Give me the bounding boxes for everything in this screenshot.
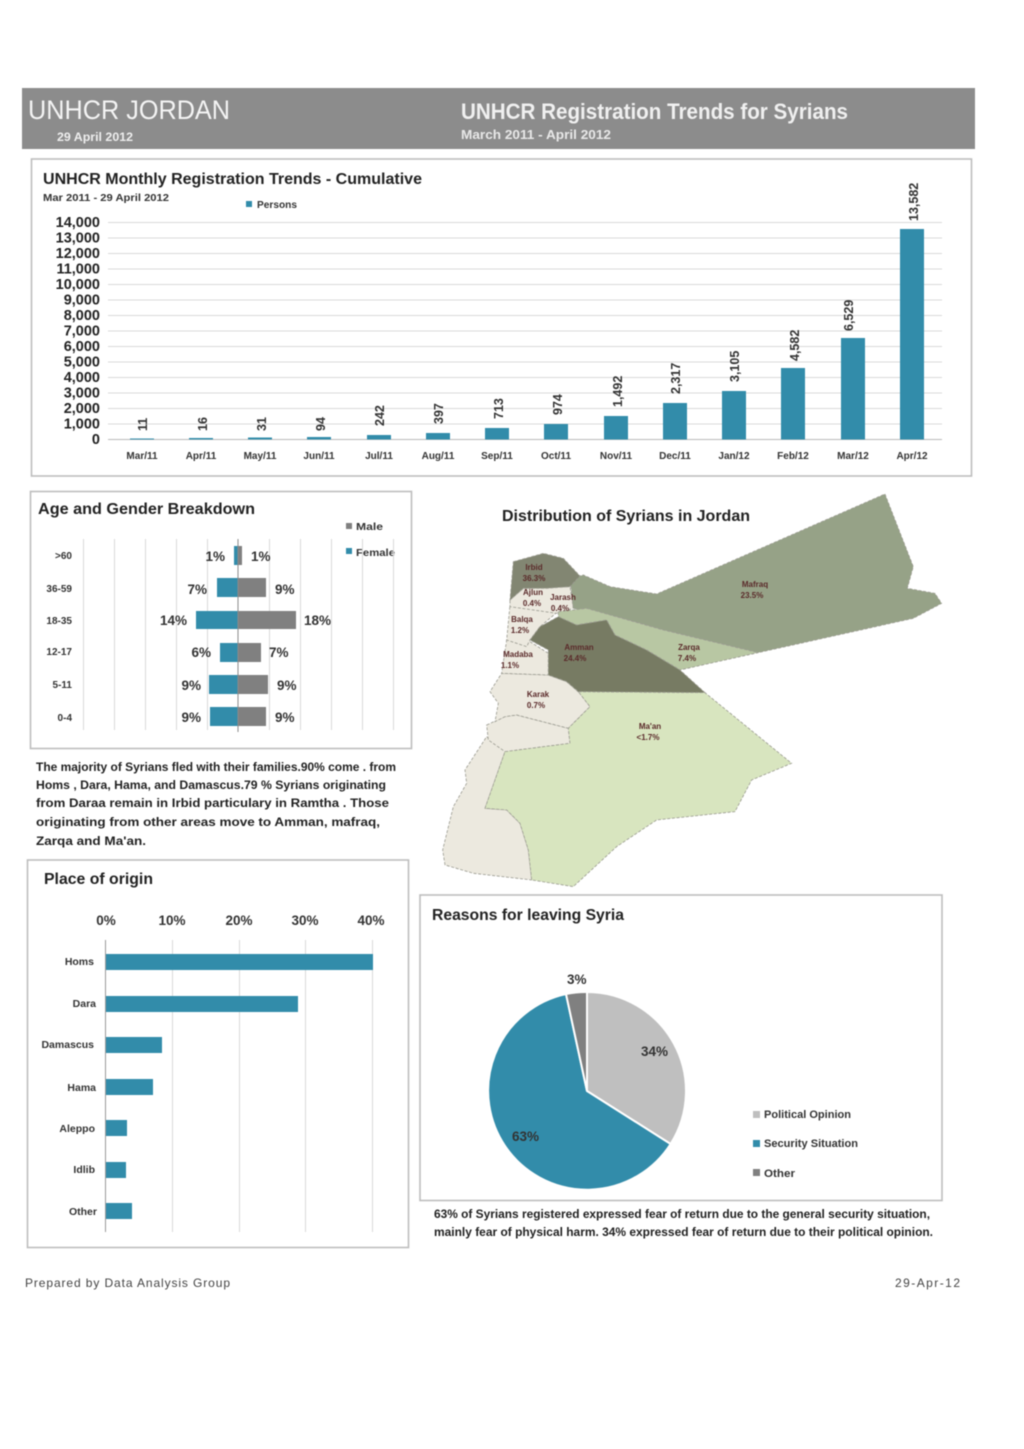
map labels: 24.4%	[564, 654, 586, 663]
bar value labels: 242	[373, 405, 387, 426]
origin axis labels: 0%	[96, 913, 116, 928]
y axis labels: 10,000	[56, 277, 100, 293]
region: Aqaba	[443, 737, 532, 880]
origin axis labels: 20%	[225, 913, 253, 928]
origin labels	[41, 956, 97, 1218]
pie chart	[488, 992, 686, 1190]
y axis labels: 6,000	[64, 339, 100, 355]
region: Balqa	[507, 605, 557, 647]
map of Jordan governorates	[443, 494, 942, 887]
bar value labels: 1,492	[611, 376, 625, 407]
map labels: 1.2%	[511, 626, 529, 635]
region: Amman	[530, 617, 705, 693]
text block: reasons summary: mainly fear of physical harm. 34% expressed fear of return due to their political opinion.	[434, 1225, 933, 1239]
map labels: Balqa	[511, 615, 533, 624]
female percent labels: 7%	[187, 582, 207, 597]
x axis labels: Jun/11	[303, 451, 335, 462]
x axis labels	[126, 451, 928, 462]
origin axis labels	[96, 913, 385, 928]
female percent labels: 9%	[181, 710, 201, 725]
bar value labels: 94	[314, 417, 328, 431]
female percent labels: 6%	[191, 645, 211, 660]
age chart title: Age and Gender Breakdown	[38, 501, 255, 518]
panel: age and gender breakdown	[30, 492, 412, 748]
x axis labels: Oct/11	[541, 451, 571, 462]
map labels: 7.4%	[678, 654, 696, 663]
map labels: 0.7%	[527, 701, 545, 710]
pie legend	[753, 1109, 858, 1180]
map labels: Amman	[564, 643, 594, 652]
pie labels: 3%	[567, 972, 587, 987]
region: Ajlun and Jarash	[510, 587, 573, 613]
map title: Distribution of Syrians in Jordan	[502, 508, 750, 525]
header subtitle: UNHCR Registration Trends for Syrians	[461, 99, 848, 124]
x axis labels: Feb/12	[777, 451, 809, 462]
y axis labels: 7,000	[64, 324, 100, 340]
origin chart title: Place of origin	[44, 871, 153, 888]
region: Karak	[490, 673, 590, 728]
y axis labels: 8,000	[64, 308, 100, 324]
bars	[130, 229, 924, 440]
origin bars	[106, 954, 373, 1219]
age labels: 12-17	[46, 647, 72, 658]
x axis labels: May/11	[244, 451, 277, 462]
map labels: Irbid	[525, 563, 543, 572]
male percent labels: 1%	[251, 549, 271, 564]
x axis labels: Sep/11	[481, 451, 513, 462]
region: Tafilah	[487, 715, 570, 752]
pie legend: Other	[764, 1168, 796, 1180]
reasons title: Reasons for leaving Syria	[432, 907, 624, 924]
origin axis labels: 40%	[357, 913, 385, 928]
map labels: <1.7%	[637, 733, 659, 742]
origin axis labels: 30%	[291, 913, 319, 928]
y axis labels	[56, 215, 100, 448]
y axis labels: 3,000	[64, 386, 100, 402]
region: Zarqa	[558, 608, 758, 670]
header banner	[22, 88, 975, 149]
panel: monthly registration trends	[32, 159, 972, 476]
chart subtitle: Mar 2011 - 29 April 2012	[43, 193, 169, 204]
male bars	[238, 546, 296, 726]
pie legend: Security Situation	[764, 1138, 858, 1150]
origin labels: Aleppo	[59, 1123, 95, 1135]
x axis labels: Jul/11	[365, 451, 393, 462]
male percent labels: 9%	[277, 678, 297, 693]
region: Madaba	[502, 640, 548, 675]
y axis labels: 11,000	[56, 262, 100, 278]
header title: UNHCR Jordan: UNHCR JORDAN	[28, 95, 230, 125]
y axis labels: 9,000	[64, 292, 100, 308]
map labels: Mafraq	[742, 580, 768, 589]
region: Ma'an	[485, 692, 792, 887]
origin labels: Other	[69, 1206, 97, 1218]
legend: persons: Persons	[257, 200, 297, 211]
panel: reasons for leaving Syria	[420, 895, 942, 1200]
y axis labels: 2,000	[64, 401, 100, 417]
origin labels: Hama	[67, 1082, 96, 1094]
chart title: UNHCR Monthly Registration Trends - Cumulative	[43, 171, 422, 188]
pie labels: 63%	[512, 1129, 539, 1144]
origin labels: Idlib	[73, 1164, 95, 1176]
text block: family summary: Zarqa and Ma'an.	[36, 834, 146, 848]
y axis labels: 4,000	[64, 370, 100, 386]
origin labels: Homs	[65, 956, 94, 968]
x axis labels: Nov/11	[600, 451, 633, 462]
x axis labels: Mar/12	[837, 451, 869, 462]
bar value labels: 3,105	[728, 351, 742, 382]
bar value labels	[136, 183, 921, 431]
female percent labels: 9%	[181, 678, 201, 693]
map labels: Karak	[527, 690, 550, 699]
region: Irbid	[510, 553, 580, 600]
map labels	[501, 563, 768, 742]
bar value labels: 397	[432, 403, 446, 424]
y axis labels: 12,000	[56, 246, 100, 262]
age labels: 36-59	[46, 584, 72, 595]
female percent labels	[160, 549, 225, 725]
y axis labels: 0	[92, 432, 100, 448]
legend: male and female: Male	[356, 521, 383, 533]
legend: male and female	[346, 521, 395, 559]
map labels: 0.4%	[551, 604, 569, 613]
origin labels: Dara	[73, 998, 96, 1010]
footer: date: 29-Apr-12	[895, 1276, 960, 1290]
text block: family summary: Homs , Dara, Hama, and Damascus.79 % Syrians originating	[36, 778, 386, 792]
bar value labels: 16	[196, 417, 210, 431]
x axis labels: Jan/12	[718, 451, 750, 462]
text block: reasons summary	[434, 1207, 933, 1239]
x axis labels: Dec/11	[659, 451, 691, 462]
map labels: 0.4%	[523, 599, 541, 608]
header date range: March 2011 - April 2012	[461, 127, 611, 142]
bar value labels: 31	[255, 417, 269, 431]
map labels: Jarash	[550, 593, 576, 602]
header date: 29 April 2012	[57, 130, 133, 144]
panel: place of origin	[28, 860, 408, 1248]
y axis labels: 1,000	[64, 416, 100, 432]
female percent labels: 1%	[205, 549, 225, 564]
map labels: Ajlun	[523, 588, 543, 597]
male percent labels	[251, 549, 331, 725]
female percent labels: 14%	[160, 613, 187, 628]
bar value labels: 974	[551, 394, 565, 415]
bar value labels: 713	[492, 398, 506, 419]
male percent labels: 9%	[275, 710, 295, 725]
origin axis labels: 10%	[158, 913, 186, 928]
age labels: >60	[55, 551, 72, 562]
pie labels	[512, 972, 668, 1144]
male percent labels: 18%	[304, 613, 331, 628]
bar value labels: 13,582	[907, 183, 921, 221]
female bars	[196, 546, 238, 726]
pie labels: 34%	[641, 1044, 668, 1059]
x axis labels: Apr/11	[186, 451, 217, 462]
x axis labels: Aug/11	[422, 451, 455, 462]
region: Mafraq	[570, 494, 942, 653]
map labels: Madaba	[503, 650, 533, 659]
pie legend: Political Opinion	[764, 1109, 851, 1121]
map labels: 36.3%	[523, 574, 545, 583]
x axis labels: Mar/11	[126, 451, 158, 462]
origin labels: Damascus	[41, 1039, 94, 1051]
map labels: Zarqa	[678, 643, 700, 652]
y axis labels: 5,000	[64, 354, 100, 370]
age labels: 5-11	[53, 680, 72, 691]
text block: family summary	[36, 760, 396, 848]
text block: reasons summary: 63% of Syrians registered expressed fear of return due to the general security situation,	[434, 1207, 930, 1221]
footer: prepared by: Prepared by Data Analysis Group	[25, 1276, 230, 1290]
age labels	[46, 551, 72, 724]
panel: distribution map	[443, 494, 942, 887]
male percent labels: 7%	[269, 645, 289, 660]
map labels: 1.1%	[501, 661, 519, 670]
bar value labels: 6,529	[842, 300, 856, 331]
legend: male and female: Female	[356, 547, 395, 559]
y axis labels: 14,000	[56, 215, 100, 231]
text block: family summary: originating from other areas move to Amman, mafraq,	[36, 815, 380, 829]
text block: family summary: from Daraa remain in Irbid particulary in Ramtha . Those	[36, 796, 389, 810]
map labels: Ma'an	[639, 722, 661, 731]
age labels: 0-4	[58, 713, 72, 724]
text block: family summary: The majority of Syrians fled with their families.90% come . from	[36, 760, 396, 774]
y axis labels: 13,000	[56, 230, 100, 246]
male percent labels: 9%	[275, 582, 295, 597]
x axis labels: Apr/12	[896, 451, 928, 462]
age labels: 18-35	[46, 616, 72, 627]
map labels: 23.5%	[741, 591, 763, 600]
bar value labels: 11	[136, 418, 150, 431]
bar value labels: 2,317	[669, 363, 683, 394]
bar value labels: 4,582	[788, 330, 802, 361]
